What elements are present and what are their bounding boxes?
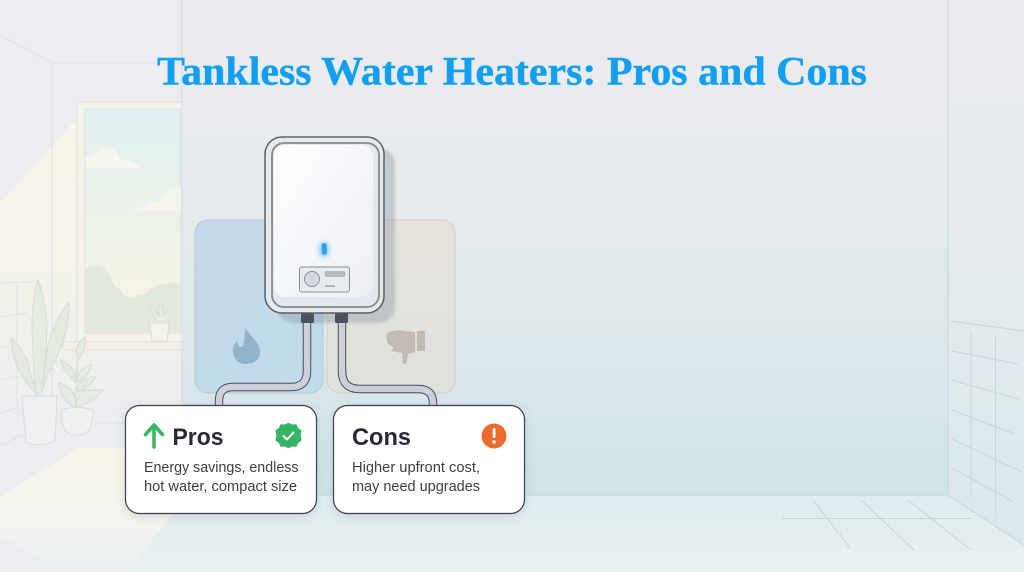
title: Tankless Water Heaters: Pros and Cons xyxy=(157,48,867,94)
potted plants xyxy=(11,280,103,445)
cons text: may need upgrades xyxy=(352,478,480,495)
window with view xyxy=(63,102,182,350)
panel: pros backdrop xyxy=(195,220,323,393)
card: cons xyxy=(334,406,524,514)
indicator light xyxy=(319,242,329,257)
pros heading: Pros xyxy=(172,424,224,451)
icon: water heater xyxy=(219,137,433,408)
pros text: Energy savings, endless xyxy=(144,459,298,476)
cons heading: Cons xyxy=(352,424,411,451)
icon: thumbs down xyxy=(386,330,425,364)
pros text: hot water, compact size xyxy=(144,478,297,495)
icon: check badge xyxy=(276,424,301,448)
cons text: Higher upfront cost, xyxy=(352,459,480,476)
icon: up arrow xyxy=(146,425,162,447)
icon: flame xyxy=(233,328,260,364)
card: pros xyxy=(126,406,316,514)
clouds xyxy=(86,147,181,211)
water pipes xyxy=(219,320,433,408)
control panel xyxy=(300,267,350,292)
windowsill plant xyxy=(149,303,171,341)
heater casing xyxy=(265,137,384,313)
panel: cons backdrop xyxy=(327,220,455,393)
distant trees xyxy=(86,266,181,333)
icon: alert xyxy=(482,424,506,448)
